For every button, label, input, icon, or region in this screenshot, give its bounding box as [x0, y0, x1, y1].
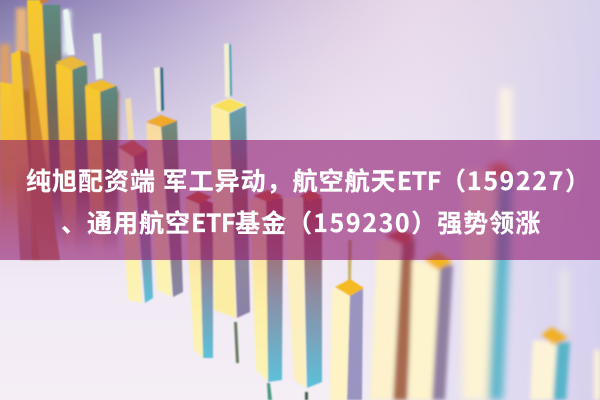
bar group: right bars — [330, 279, 364, 400]
far right bar — [530, 327, 600, 400]
blurred foreground bars on the right — [462, 88, 568, 400]
title line 1: 纯旭配资端 军工异动，航空航天ETF（159227） — [26, 162, 591, 198]
small stems below the bars — [234, 240, 352, 400]
mid bars — [118, 98, 322, 388]
blurred rear bars on the left — [0, 8, 118, 250]
title band — [0, 140, 600, 260]
bar group: large yellow bars on the left — [0, 0, 118, 260]
title line 2: 、通用航空ETF基金（159230）强势领涨 — [61, 204, 541, 240]
thin sticks above the bars — [63, 9, 232, 140]
